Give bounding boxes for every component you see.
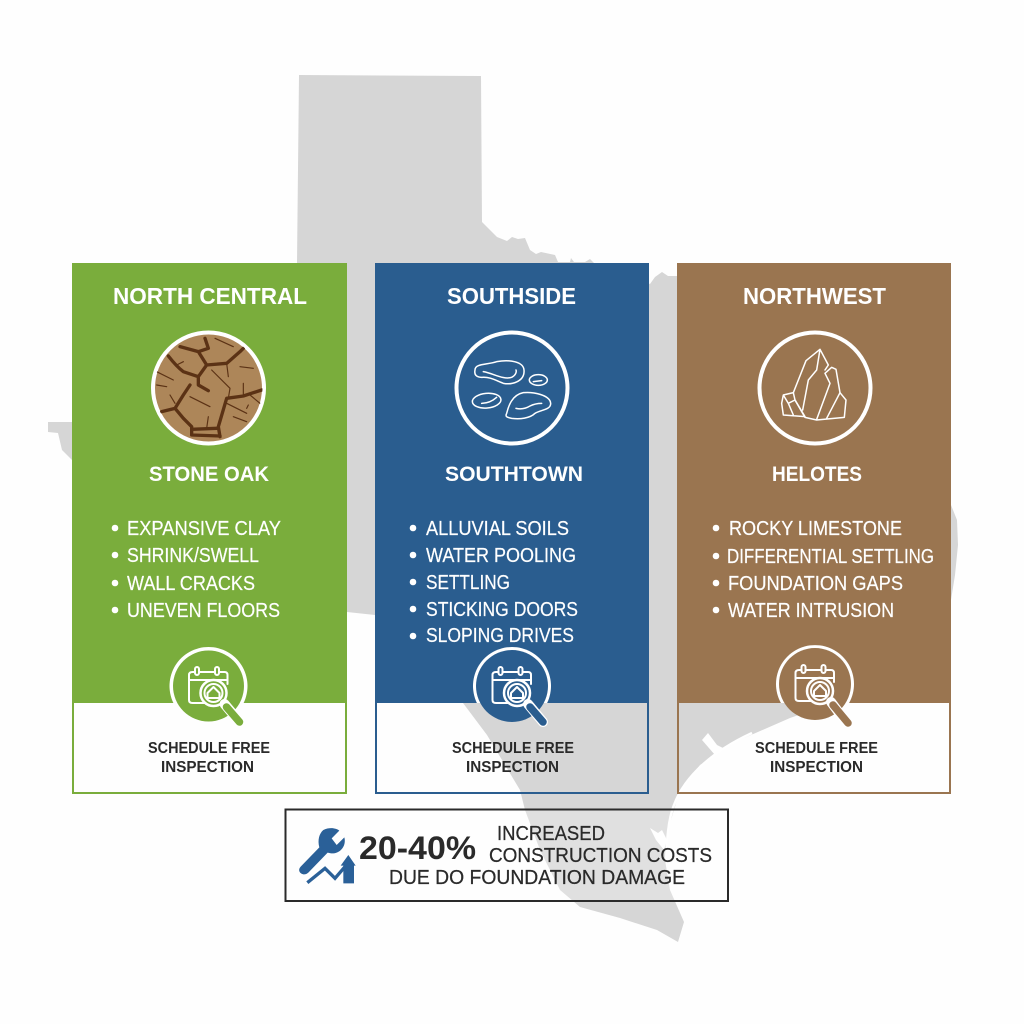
- panel background: north central: [72, 263, 347, 703]
- footer outline: southside: [376, 703, 648, 793]
- callout text: INCREASED: [497, 823, 605, 845]
- bullet list: southside: SLOPING DRIVES: [426, 625, 574, 647]
- bullet list: southside: WATER POOLING: [426, 545, 576, 567]
- bullet list: southside: STICKING DOORS: [426, 599, 578, 621]
- bullet list: northwest: WATER INTRUSION: [728, 600, 894, 622]
- bullet list: north central: SHRINK/SWELL: [127, 545, 259, 567]
- call to action: southside: SCHEDULE FREE: [452, 740, 574, 757]
- bullet list: north central: [112, 518, 281, 622]
- callout text: DUE DO FOUNDATION DAMAGE: [389, 867, 685, 889]
- subheading: stone oak: STONE OAK: [149, 463, 269, 486]
- call to action: southside: [452, 740, 574, 776]
- bullet list: north central: UNEVEN FLOORS: [127, 600, 280, 622]
- icon: limestone rock: [760, 332, 870, 444]
- callout: construction cost statistic: [286, 810, 728, 901]
- bullet list: north central: WALL CRACKS: [127, 573, 255, 595]
- heading: southside: SOUTHSIDE: [447, 283, 576, 309]
- bullet list: southside: [410, 518, 578, 647]
- callout text: CONSTRUCTION COSTS: [489, 845, 712, 867]
- background map of Texas: [48, 75, 958, 942]
- call to action: north central: INSPECTION: [161, 759, 254, 776]
- bullet list: southside: SETTLING: [426, 572, 510, 594]
- bullet list: northwest: DIFFERENTIAL SETTLING: [727, 546, 934, 568]
- call to action: north central: SCHEDULE FREE: [148, 740, 270, 757]
- subheading: southtown: SOUTHTOWN: [445, 463, 583, 486]
- icon: wrench and rising arrow: [299, 828, 356, 883]
- panel: north central: [72, 263, 347, 793]
- icon: water puddles: [456, 332, 568, 444]
- panel: northwest: [677, 263, 951, 793]
- icon: calendar inspection, blue: [473, 647, 551, 722]
- bullet list: northwest: FOUNDATION GAPS: [728, 573, 903, 595]
- callout frame: [286, 810, 728, 901]
- bullet list: southside: ALLUVIAL SOILS: [426, 518, 569, 540]
- heading: north central: NORTH CENTRAL: [113, 283, 307, 309]
- icon: cracked dry soil: [153, 332, 264, 444]
- footer outline: northwest: [678, 703, 950, 793]
- heading: northwest: NORTHWEST: [743, 283, 886, 309]
- subheading: helotes: HELOTES: [772, 463, 862, 486]
- bullet list: northwest: ROCKY LIMESTONE: [729, 518, 902, 540]
- bullet list: north central: EXPANSIVE CLAY: [127, 518, 281, 540]
- panel background: northwest: [677, 263, 951, 703]
- panel background: southside: [375, 263, 649, 703]
- callout text: [389, 823, 712, 889]
- statistic: 20-40%: 20-40%: [359, 830, 476, 866]
- bullet list: northwest: [713, 518, 934, 622]
- icon: calendar inspection, brown: [776, 645, 854, 723]
- icon: calendar inspection, green: [170, 647, 248, 722]
- footer outline: north central: [73, 703, 346, 793]
- call to action: southside: INSPECTION: [466, 759, 559, 776]
- call to action: north central: [148, 740, 270, 776]
- panel: southside: [375, 263, 649, 793]
- call to action: northwest: INSPECTION: [770, 759, 863, 776]
- call to action: northwest: [755, 740, 878, 776]
- call to action: northwest: SCHEDULE FREE: [755, 740, 878, 757]
